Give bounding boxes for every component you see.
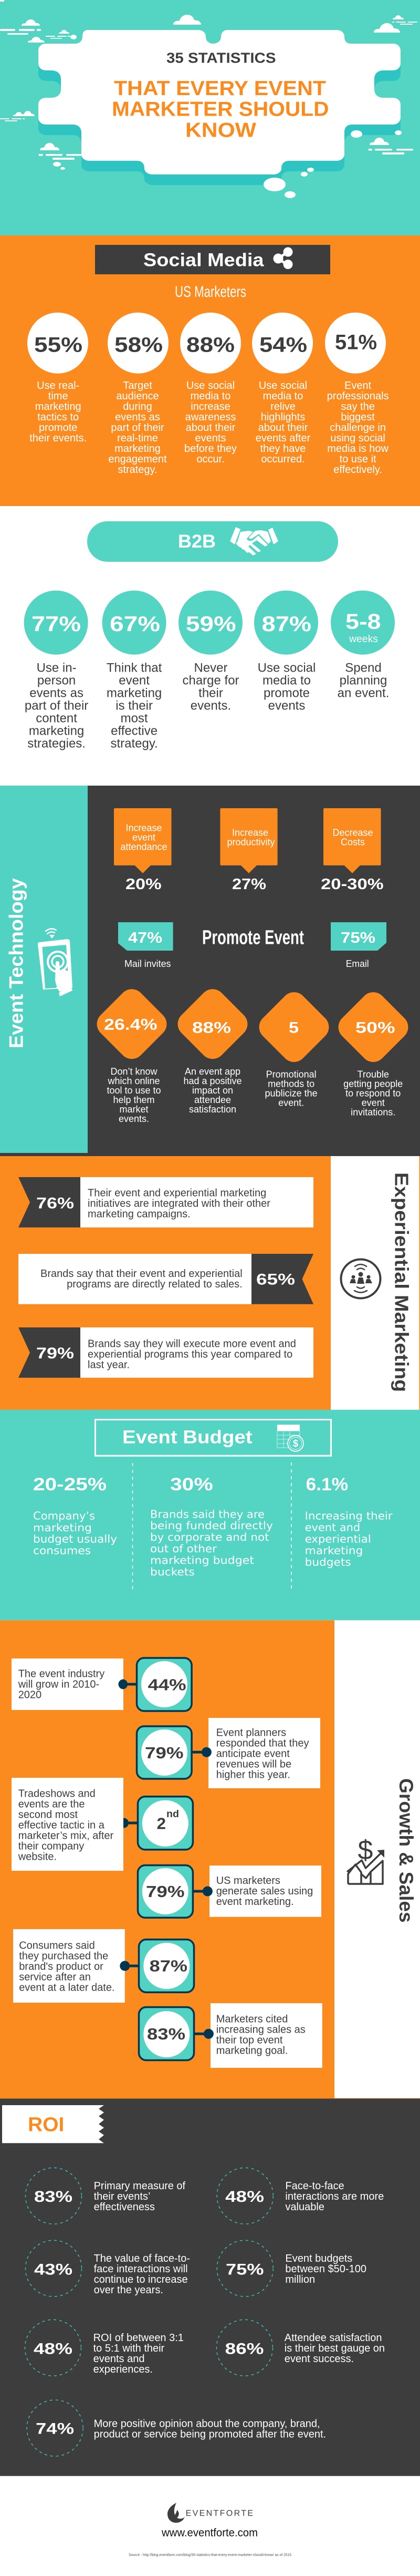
stat: 6.1%: budgets	[305, 1556, 351, 1569]
stat: 30%: 30%	[170, 1475, 213, 1495]
ribbon: 79%: 79%	[36, 1345, 74, 1362]
panel: ROI	[0, 2099, 420, 2476]
website url: www.eventforte.com	[161, 2527, 258, 2539]
stat: 59%: their	[198, 686, 223, 700]
stat: 83%	[139, 2007, 214, 2060]
text box: event planners: responded that they	[216, 1737, 309, 1749]
stat: 75% budgets	[226, 2253, 366, 2285]
stat: 58%: events as	[115, 411, 160, 423]
text box: tradeshows: effective tactic in a	[18, 1819, 105, 1831]
stat: 30%: marketing budget	[150, 1554, 254, 1567]
callout: decrease costs: Costs	[341, 837, 365, 848]
heading: promote event: Promote Event	[202, 927, 304, 949]
text box: US marketers: generate sales using	[216, 1885, 313, 1897]
stat: 43% value: 43%	[34, 2261, 72, 2278]
stat diamond: 50%: 50%	[355, 1019, 395, 1036]
stat: 43% value: face interactions will	[94, 2263, 188, 2275]
text box: tradeshows: marketer’s mix, after	[18, 1830, 114, 1841]
stat: 54%: media to	[263, 390, 303, 402]
stat: 51%: to use it	[340, 454, 376, 465]
text box: event planners: anticipate event	[216, 1748, 290, 1759]
callout: increase attendance: event	[132, 832, 155, 843]
callout: increase attendance: 20%	[125, 876, 162, 893]
text box: consumers	[13, 1929, 125, 2003]
text box: event planners: Event planners	[216, 1727, 286, 1738]
stat: 51%: effectively.	[333, 464, 382, 476]
stat: 87%: 87%	[150, 1957, 187, 1975]
stat: 83%: 83%	[147, 2025, 185, 2043]
stat: 59%: 59%	[186, 612, 236, 636]
ribbon: 65%: programs are directly related to sales.	[67, 1279, 243, 1290]
stat: 20-25%: budget usually	[33, 1533, 117, 1545]
stat: 67%: 67%	[110, 612, 160, 636]
stat diamond: 50%: to respond to	[345, 1088, 401, 1099]
ribbon: 79%: last year.	[88, 1359, 130, 1371]
callout: increase productivity: productivity	[227, 837, 275, 848]
stat: 87%	[254, 591, 318, 713]
stat diamond: 26.4%: Don’t know	[110, 1066, 158, 1077]
icon: growth chart	[347, 1835, 384, 1884]
ribbon: 65%: 65%	[256, 1271, 295, 1289]
icon: handshake	[230, 527, 278, 555]
stat diamond: 26.4%: 26.4%	[104, 1016, 158, 1033]
stat: 88%: about their	[186, 422, 236, 434]
stat: 86% satisfaction: event success.	[285, 2353, 354, 2365]
stat: 20-25%: Company’s	[33, 1510, 95, 1522]
stat: 79% sales: 79%	[146, 1882, 185, 1901]
stat: 55%: Use real-	[37, 380, 79, 391]
stat: 88%: media to	[191, 390, 230, 402]
stat: 43% value	[34, 2253, 190, 2296]
stat: 44%: 44%	[148, 1676, 186, 1694]
stat diamond: 26.4%: tool to use to	[107, 1085, 161, 1096]
ribbon: 79%	[18, 1327, 313, 1378]
stat: 77%: strategies.	[27, 737, 86, 750]
stat diamond: 88%: attendee	[194, 1095, 231, 1105]
text box: US marketers: event marketing.	[216, 1896, 294, 1908]
stat: 51%: 51%	[335, 331, 377, 354]
stat: 74% opinion: product or service being promoted after the event.	[94, 2428, 326, 2440]
stat: 30%: by corporate and not	[150, 1531, 269, 1543]
stat: 74% opinion: More positive opinion about the company, brand,	[94, 2418, 320, 2429]
stat: 51%: media is how	[327, 443, 389, 455]
heading: ROI banner: ROI	[28, 2114, 64, 2136]
heading: B2B: B2B	[178, 531, 216, 552]
stat: 43% value: The value of face-to-	[94, 2253, 190, 2264]
stat diamond: 88%: had a positive	[183, 1076, 242, 1086]
logo: eventforte	[167, 2503, 253, 2523]
text box: event industry	[12, 1658, 123, 1710]
text box: tradeshows: website.	[18, 1851, 57, 1862]
stat: 48% face-to-face: interactions are more	[285, 2191, 384, 2202]
stat diamond: 26.4%	[92, 984, 172, 1124]
panel: hero header	[0, 0, 420, 235]
stat: 55%: marketing	[35, 401, 81, 413]
callout: increase attendance	[114, 808, 171, 893]
stat: 55%	[27, 313, 88, 444]
text box: tradeshows: events are the	[18, 1798, 85, 1810]
ribbon: 76%: marketing campaigns.	[88, 1209, 191, 1220]
text box: event industry: The event industry	[18, 1668, 104, 1680]
stat: 75% budgets: million	[285, 2274, 315, 2285]
title: 35 STATISTICS	[166, 49, 276, 66]
stat: 79% planners	[136, 1726, 212, 1779]
stat: 51%: say the	[341, 401, 375, 413]
ribbon: 76%	[18, 1177, 313, 1228]
stat diamond: 88%: impact on	[192, 1085, 233, 1096]
stat: 58%: during	[123, 401, 152, 413]
tag: mail invites 47%	[118, 922, 173, 969]
heading: B2B	[87, 521, 338, 562]
stat: 86% satisfaction: 86%	[225, 2340, 264, 2357]
stat: 75% budgets: 75%	[226, 2261, 264, 2278]
stat: 77%: part of their	[25, 699, 88, 713]
stat: 51%: professionals	[327, 390, 389, 402]
heading: event budget: Event Budget	[122, 1427, 253, 1448]
ribbon: 65%: Brands say that their event and experiential	[40, 1268, 243, 1280]
stat: 51%: using social	[330, 432, 385, 444]
stat: 51%	[325, 313, 389, 476]
panel: social media	[0, 235, 420, 506]
stat: 77%: events as	[29, 686, 83, 700]
text box: US marketers: US marketers	[216, 1875, 280, 1887]
stat: 67%: most	[121, 712, 148, 725]
stat: 58%: 58%	[114, 333, 163, 356]
stat diamond: 5: Promotional	[266, 1069, 317, 1080]
text box: consumers: they purchased the	[19, 1950, 108, 1962]
title: KNOW	[185, 119, 256, 142]
stat diamond: 50%: invitations.	[351, 1107, 395, 1118]
stat diamond: 5: publicize the	[265, 1088, 318, 1099]
ribbon: 76%: Their event and experiential marketing	[88, 1188, 266, 1199]
text box: marketers cited: Marketers cited	[216, 2013, 288, 2025]
stat: 6.1%: experiential	[305, 1533, 371, 1545]
stat: 54%: events after	[256, 432, 311, 444]
callout: increase productivity: 27%	[232, 876, 266, 893]
callout: increase attendance: Increase	[125, 823, 162, 833]
stat: 75% budgets: between $50-100	[285, 2263, 366, 2275]
stat: 5-8 weeks: 5-8	[345, 610, 381, 634]
stat: 88%: Use social	[186, 380, 235, 391]
heading: social media: Social Media	[143, 250, 264, 271]
icon: audience ring	[341, 1259, 380, 1298]
panel: B2B	[0, 506, 420, 786]
stat: 79% sales	[138, 1866, 213, 1918]
stat: 74% opinion	[36, 2418, 326, 2440]
stat: 2nd: nd	[166, 1809, 179, 1820]
footer	[129, 2503, 291, 2557]
stat: 74% opinion: 74%	[36, 2420, 74, 2438]
stat: 77%	[24, 591, 88, 750]
stat: 55%: time	[48, 390, 68, 402]
stat: 88%: before they	[184, 443, 237, 455]
panel: event budget	[0, 1410, 420, 1620]
icon: budget sheet	[277, 1425, 303, 1451]
stat: 30%	[150, 1475, 273, 1578]
tag: email 75%	[331, 922, 386, 969]
stat: 55%: tactics to	[37, 411, 79, 423]
stat diamond: 5: 5	[289, 1019, 299, 1036]
callout: decrease costs: 20-30%	[321, 876, 384, 893]
stat: 79% planners: 79%	[145, 1744, 184, 1762]
stat: 5-8 weeks: planning	[340, 674, 387, 687]
stat: 86% satisfaction: is their best gauge on	[285, 2343, 385, 2354]
stat: 6.1%: event and	[305, 1521, 360, 1534]
subheading: US Marketers: US Marketers	[175, 283, 246, 301]
text box: tradeshows: Tradeshows and	[18, 1788, 96, 1799]
stat diamond: 26.4%: market	[119, 1104, 149, 1115]
stat: 83% effectiveness	[34, 2180, 186, 2213]
stat: 58%: audience	[116, 390, 159, 402]
stat: 58%: part of their	[111, 422, 164, 434]
stat: 54%: occurred.	[261, 454, 305, 465]
stat: 55%: 55%	[34, 333, 82, 356]
stat: 83% effectiveness: effectiveness	[94, 2201, 155, 2213]
tag: email 75%: Email	[346, 959, 369, 969]
stat: 30%: buckets	[150, 1565, 195, 1578]
stat: 67%: effective	[111, 724, 158, 738]
stat: 30%: out of other	[150, 1542, 217, 1555]
stat: 43% value: over the years.	[94, 2284, 163, 2296]
ribbon: 79%: experiential programs this year compared to	[88, 1348, 292, 1360]
stat: 44%	[118, 1658, 192, 1711]
stat diamond: 26.4%: help them	[113, 1095, 155, 1105]
title: MARKETER SHOULD	[112, 98, 329, 121]
stat: 54%: relive	[270, 401, 296, 413]
panel: experiential marketing	[0, 1156, 420, 1410]
stat: 54%: highlights	[261, 411, 305, 423]
stat: 77%: person	[37, 674, 76, 687]
stat diamond: 26.4%: which online	[107, 1076, 160, 1086]
stat: 86% satisfaction	[225, 2332, 385, 2365]
heading: event budget	[96, 1420, 331, 1456]
stat: 67%: marketing	[107, 686, 162, 700]
stat: 2nd: 2	[156, 1815, 166, 1833]
panel: growth and sales	[0, 1620, 420, 2099]
stat: 59%: charge for	[182, 674, 239, 687]
stat: 54%: they have	[260, 443, 306, 455]
stat: 55%: their events.	[29, 432, 87, 444]
stat: 51%: challenge in	[330, 422, 386, 434]
stat: 48% face-to-face: 48%	[225, 2188, 264, 2206]
text box: tradeshows	[12, 1778, 123, 1871]
decorative bubbles over shadow	[264, 130, 402, 198]
text box: marketers cited: increasing sales as	[216, 2024, 306, 2035]
text box: marketers cited: marketing goal.	[216, 2045, 288, 2056]
stat: 54%: Use social	[259, 380, 307, 391]
stat: 88%: increase	[191, 401, 230, 413]
title: THAT EVERY EVENT	[114, 77, 326, 100]
stat: 77%: 77%	[32, 612, 81, 636]
stat: 86% satisfaction: Attendee satisfaction	[285, 2332, 382, 2344]
stat diamond: 50%: Trouble	[358, 1069, 389, 1080]
stat: 67%	[102, 591, 166, 750]
stat diamond: 88%: An event app	[185, 1066, 240, 1077]
text box: consumers: event at a later date.	[19, 1982, 115, 1993]
stat: 20-25%	[33, 1475, 117, 1557]
stat: 48% ROI	[34, 2332, 184, 2375]
source note: Source : http://blog.eventfarm.com/blog/35-statistics-that-every-event-marketer-should-know/ as of 2015	[129, 2553, 291, 2557]
stat: 75% budgets: Event budgets	[285, 2253, 352, 2264]
stat: 88%: events	[195, 432, 226, 444]
text box: marketers cited: their top event	[216, 2034, 283, 2046]
callout: decrease costs	[321, 808, 384, 893]
stat: 6.1%: 6.1%	[306, 1475, 348, 1495]
stat: 5-8 weeks: Spend	[345, 661, 382, 675]
stat: 77%: Use in-	[37, 661, 77, 675]
icon: budget sheet: $	[293, 1438, 299, 1449]
text box: event planners: higher this year.	[216, 1769, 290, 1780]
stat: 48% ROI: to 5:1 with their	[93, 2343, 165, 2354]
stat: 55%: promote	[39, 422, 77, 434]
stat: 87%: 87%	[261, 612, 311, 636]
stat: 67%: strategy.	[110, 737, 158, 750]
stat: 48% ROI: events and	[93, 2353, 144, 2365]
stat diamond: 50%: getting people	[343, 1079, 403, 1089]
stat: 48% face-to-face	[225, 2180, 384, 2213]
stat: 48% ROI: 48%	[34, 2340, 72, 2357]
stat: 87%: Use social	[258, 661, 316, 675]
stat: 20-25%: consumes	[33, 1544, 91, 1557]
stat: 48% face-to-face: valuable	[285, 2201, 324, 2213]
heading: event technology vertical: Event Technology	[5, 878, 27, 1048]
stat: 48% face-to-face: Face-to-face	[285, 2180, 344, 2192]
stat: 59%: Never	[194, 661, 228, 675]
stat: 83% effectiveness: Primary measure of	[94, 2180, 186, 2192]
stat: 88%: awareness	[185, 411, 236, 423]
ribbon: 76%: 76%	[36, 1194, 74, 1212]
stat: 54%	[252, 313, 313, 465]
icon: growth chart: $	[358, 1835, 373, 1866]
stat: 58%: real-time	[117, 432, 158, 444]
callout: increase productivity	[220, 808, 278, 893]
stat: 58%	[108, 313, 169, 476]
stat diamond: 88%	[173, 984, 253, 1115]
callout: increase productivity: Increase	[232, 828, 268, 838]
title	[112, 49, 329, 142]
stat: 88%: occur.	[196, 454, 225, 465]
text box: event planners: revenues will be	[216, 1758, 291, 1770]
stat: 87%: events	[268, 699, 305, 713]
stat: 30%: being funded directly	[150, 1519, 273, 1532]
icon: share	[273, 247, 293, 269]
ribbon: 79%: Brands say they will execute more event and	[88, 1338, 296, 1349]
stat diamond: 5: event.	[278, 1098, 304, 1108]
stat: 6.1%: marketing	[305, 1544, 363, 1557]
panel: event technology	[0, 786, 420, 1156]
text box: event planners	[208, 1718, 320, 1788]
stat: 51%: Event	[344, 380, 372, 391]
icon: phone touch	[38, 929, 72, 996]
stat: 87%: media to	[262, 674, 311, 687]
stat: 43% value: continue to increase	[94, 2274, 188, 2285]
stat: 20-25%: marketing	[33, 1521, 92, 1534]
callout: decrease costs: Decrease	[332, 828, 373, 838]
tag: mail invites 47%: 47%	[128, 930, 162, 946]
heading: social media	[95, 245, 330, 274]
stat diamond: 88%: satisfaction	[189, 1104, 236, 1115]
stat: 58%: marketing	[114, 443, 161, 455]
stat: 88%: 88%	[186, 333, 235, 356]
stat: 6.1%	[305, 1475, 393, 1569]
stat: 87%: promote	[264, 686, 310, 700]
heading: ROI banner	[2, 2105, 104, 2143]
text box: event industry: 2020	[18, 1689, 41, 1701]
stat: 83% effectiveness: 83%	[34, 2188, 72, 2206]
stat: 87%	[120, 1940, 194, 1992]
text box: consumers: service after an	[19, 1971, 91, 1983]
stat: 77%: content	[36, 712, 77, 725]
stat diamond: 26.4%: events.	[119, 1114, 149, 1124]
stat diamond: 88%: 88%	[192, 1019, 231, 1036]
stat: 48% ROI: experiences.	[93, 2364, 153, 2375]
tag: mail invites 47%: Mail invites	[124, 959, 171, 969]
stat: 5-8 weeks	[331, 591, 395, 700]
text box: US marketers	[209, 1866, 321, 1917]
text box: tradeshows: their company	[18, 1840, 84, 1852]
stat: 77%: marketing	[29, 724, 84, 738]
stat: 59%: events.	[191, 699, 231, 713]
heading: experiential marketing vertical: Experiential Marketing	[391, 1172, 413, 1392]
text box: tradeshows: second most	[18, 1809, 78, 1820]
stat: 6.1%: Increasing their	[305, 1510, 393, 1522]
cloud shape: title shadow	[38, 40, 401, 185]
stat: 58%: strategy.	[118, 464, 158, 476]
stat: 67%: event	[119, 674, 150, 687]
stat: 88%	[180, 313, 241, 465]
cloud shape: title background	[38, 30, 401, 174]
stat: 59%	[178, 591, 243, 713]
stat diamond: 5	[254, 987, 334, 1108]
stat diamond: 50%	[333, 987, 413, 1118]
stat: 5-8 weeks: an event.	[338, 686, 389, 700]
text box: consumers: Consumers said	[19, 1940, 95, 1951]
stat diamond: 5: methods to	[268, 1079, 314, 1089]
stat: 83% effectiveness: their events’	[94, 2191, 150, 2202]
stat: 67%: is their	[116, 699, 153, 713]
stat: 54%: 54%	[259, 333, 307, 356]
ribbon: 65%	[18, 1254, 313, 1304]
stat: 48% ROI: ROI of between 3:1	[93, 2332, 184, 2344]
text box: consumers: brand's product or	[19, 1961, 103, 1972]
stat: 58%: engagement	[108, 454, 167, 465]
stat: 20-25%: 20-25%	[33, 1475, 107, 1495]
stat: 51%: biggest	[341, 411, 375, 423]
stat: 5-8 weeks: weeks	[349, 633, 378, 645]
callout: increase attendance: attendance	[120, 842, 167, 852]
ribbon: 76%: initiatives are integrated with their other	[88, 1198, 270, 1210]
stat: 30%: Brands said they are	[150, 1508, 265, 1520]
stat diamond: 50%: event	[362, 1098, 385, 1108]
stat: 2nd	[119, 1797, 193, 1850]
text box: marketers cited	[211, 2003, 322, 2068]
text box: event industry: will grow in 2010-	[18, 1679, 99, 1691]
logo: eventforte: EVENTFORTE	[186, 2509, 253, 2518]
stat: 58%: Target	[123, 380, 152, 391]
stat: 54%: about their	[258, 422, 308, 434]
heading: growth and sales vertical: Growth & Sales	[395, 1778, 417, 1923]
tag: email 75%: 75%	[341, 930, 375, 946]
stat: 67%: Think that	[107, 661, 162, 675]
